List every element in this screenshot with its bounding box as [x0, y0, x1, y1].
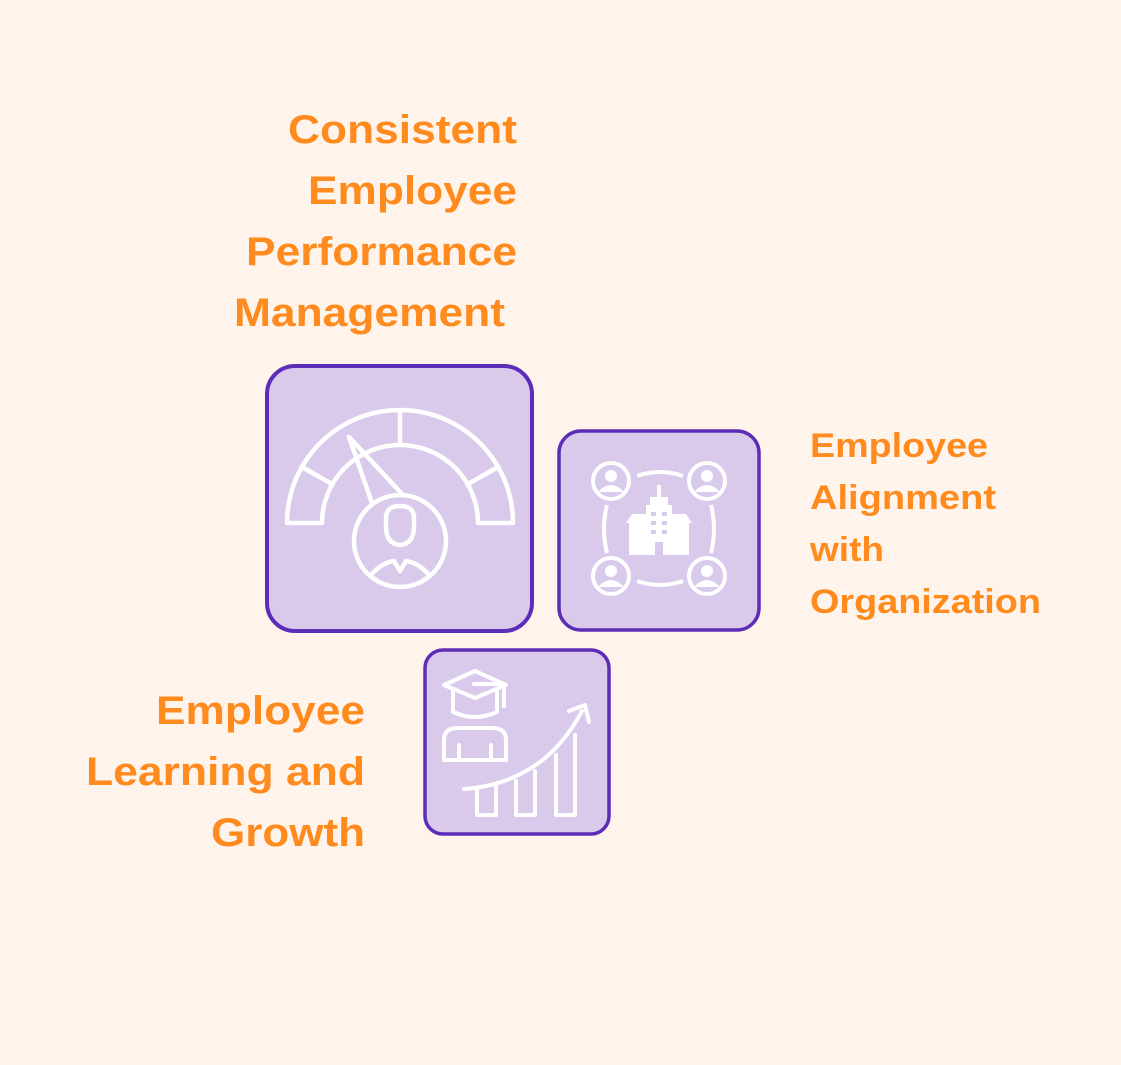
label: Employee Alignment with Organization: Alignment [810, 479, 996, 517]
label: Employee Learning and Growth [86, 689, 365, 855]
label: Employee Alignment with Organization: Organization [810, 583, 1041, 621]
title: Consistent Employee Performance Management: Employee [308, 169, 517, 213]
label: Employee Alignment with Organization: Employee [810, 427, 988, 465]
icon: gauge [287, 410, 513, 587]
title: Consistent Employee Performance Management [234, 108, 517, 335]
panel: learning and growth [425, 650, 609, 834]
panel: organization alignment [559, 431, 759, 630]
label: Employee Learning and Growth: Growth [211, 811, 365, 855]
icon: people around building [593, 463, 725, 594]
label: Employee Alignment with Organization [809, 427, 1041, 621]
title: Consistent Employee Performance Management: Management [234, 291, 505, 335]
title: Consistent Employee Performance Management: Consistent [288, 108, 517, 152]
label: Employee Learning and Growth: Employee [156, 689, 365, 733]
title: Consistent Employee Performance Management: Performance [246, 230, 517, 274]
panel: performance gauge [267, 366, 532, 631]
label: Employee Learning and Growth: Learning and [86, 750, 365, 794]
label: Employee Alignment with Organization: with [809, 531, 884, 569]
icon: graduate with growth chart [444, 671, 589, 815]
